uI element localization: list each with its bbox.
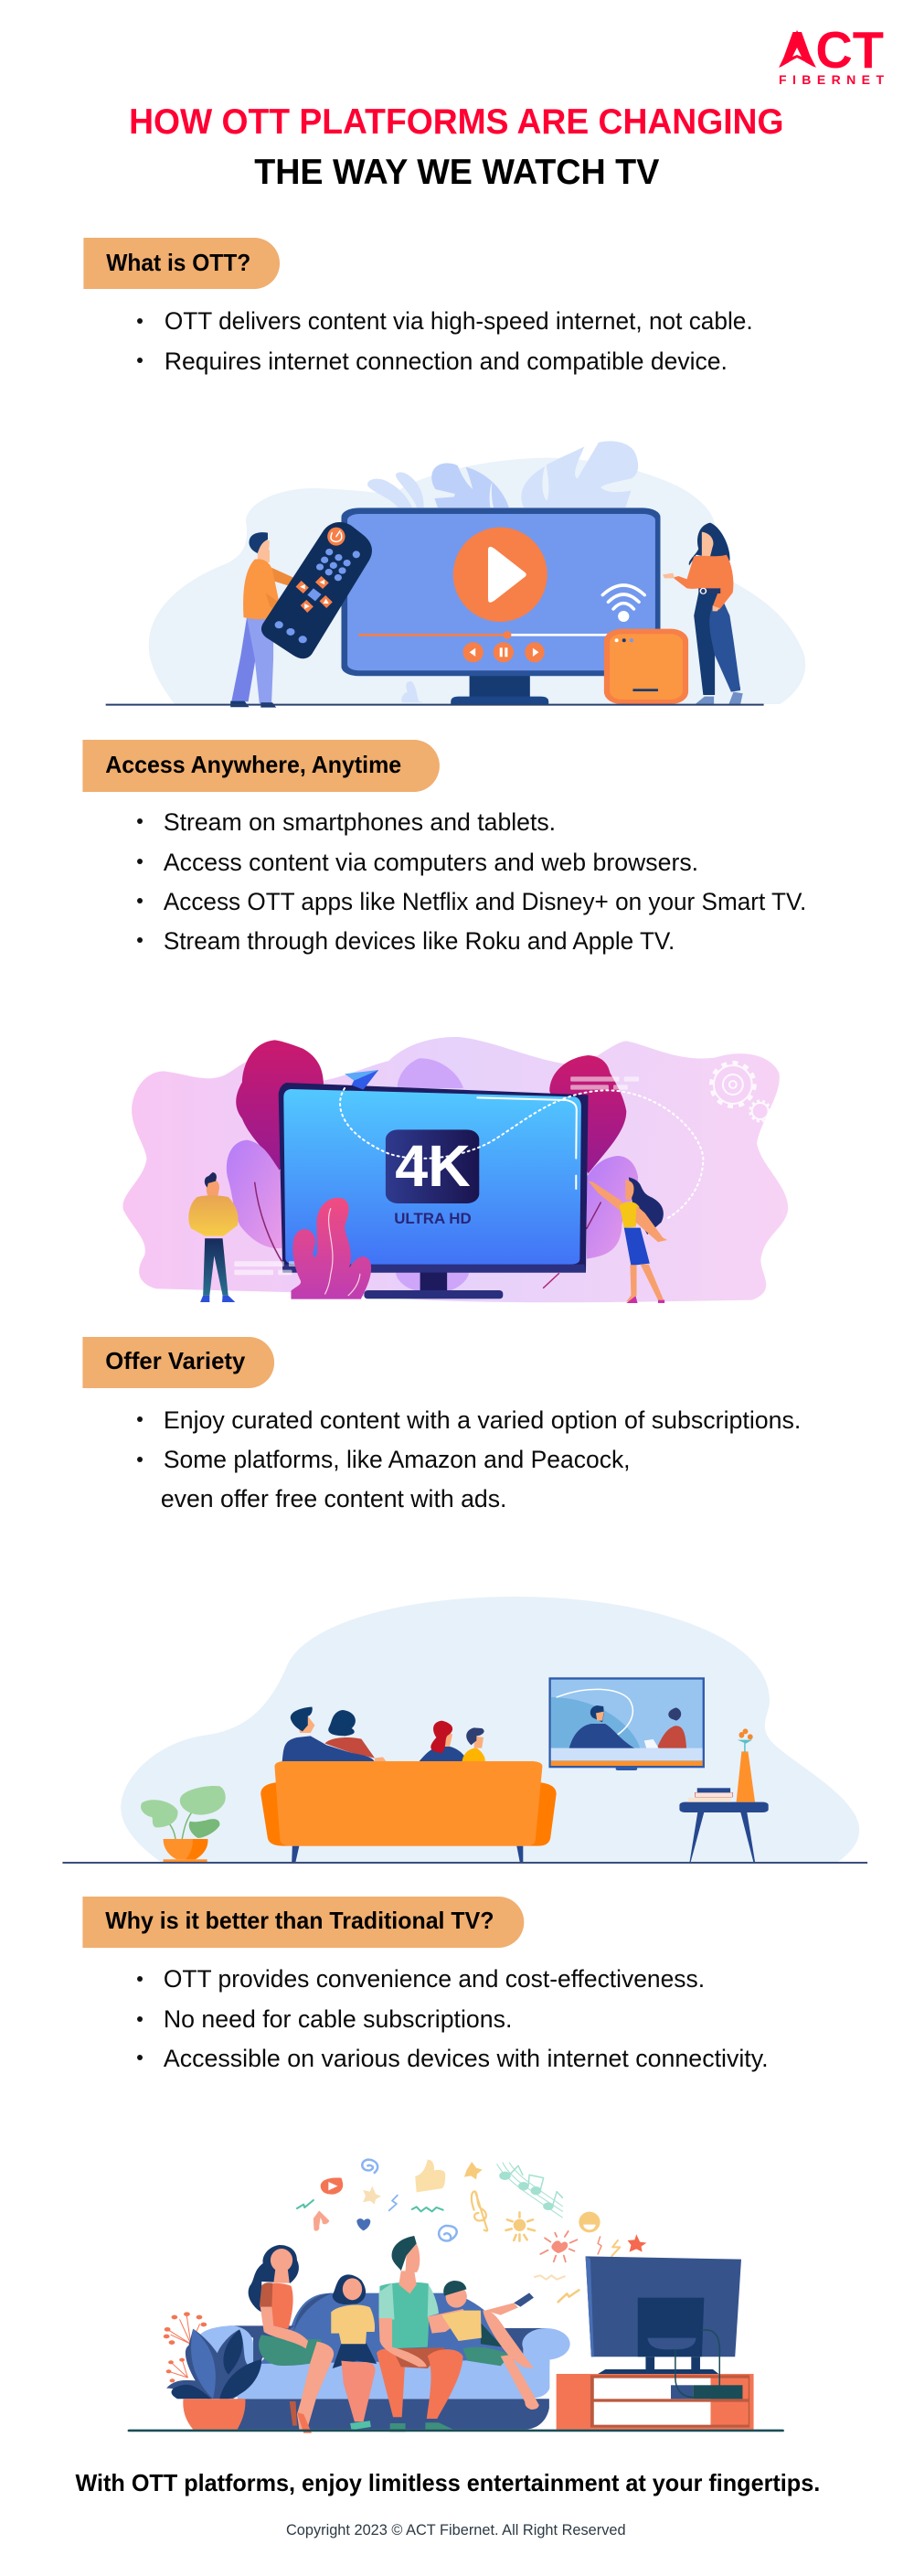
heading: Why is it better than Traditional TV? — [82, 1897, 524, 1948]
boy with remote — [441, 2281, 539, 2410]
title: THE WAY WE WATCH TV — [254, 153, 659, 192]
title — [129, 102, 783, 192]
wall TV — [548, 1677, 705, 1770]
TV — [341, 508, 661, 705]
text: ULTRA HD: ULTRA HD — [394, 1210, 472, 1227]
girl — [331, 2274, 377, 2430]
floor line — [62, 1862, 867, 1864]
background blob — [122, 1037, 788, 1302]
text block: what is OTT bullets: OTT delivers content via high-speed internet, not cable. — [165, 307, 753, 335]
side table with vase and books — [679, 1728, 769, 1862]
heading: What is OTT?: What is OTT? — [106, 251, 250, 276]
sofa — [260, 1761, 557, 1863]
family heads — [282, 1707, 485, 1762]
leaves — [367, 441, 638, 702]
woman — [249, 2245, 334, 2433]
logo: ACT Fibernet: FIBERNET — [779, 72, 884, 87]
text block: access bullets: Stream on smartphones and tablets. — [164, 808, 556, 836]
text block: access bullets: Stream through devices like Roku and Apple TV. — [164, 927, 675, 955]
potted plant — [141, 1786, 226, 1862]
text block: what is OTT bullets — [137, 307, 753, 375]
sofa — [197, 2293, 570, 2430]
man — [188, 1172, 239, 1302]
background blob — [149, 458, 805, 704]
icon: gears — [711, 1063, 771, 1121]
heading: What is OTT? — [83, 238, 280, 289]
heading: Why is it better than Traditional TV?: Why is it better than Traditional TV? — [105, 1908, 494, 1934]
text block: why better bullets: No need for cable subscriptions. — [164, 2005, 512, 2033]
plant — [164, 2312, 261, 2430]
text block: why better bullets — [137, 1965, 769, 2072]
heading: Access Anywhere, Anytime — [82, 740, 440, 792]
TV — [279, 1083, 589, 1299]
closing statement: With OTT platforms, enjoy limitless entertainment at your fingertips. — [75, 2471, 820, 2496]
text block: offer variety bullets — [137, 1406, 801, 1512]
copyright: Copyright 2023 © ACT Fibernet. All Right Reserved — [286, 2522, 626, 2539]
title: HOW OTT PLATFORMS ARE CHANGING — [129, 102, 783, 142]
text: 4K: 4K — [395, 1133, 471, 1199]
text block: access bullets: Access OTT apps like Netflix and Disney+ on your Smart TV. — [164, 888, 806, 915]
TV back — [586, 2256, 741, 2398]
TV cabinet — [557, 2374, 754, 2430]
woman — [589, 1177, 667, 1303]
heading: Access Anywhere, Anytime: Access Anywhere, Anytime — [105, 753, 401, 778]
floating icons — [297, 2160, 646, 2302]
wifi icon — [602, 585, 644, 622]
floor line — [106, 704, 764, 706]
illustration: family watching TV with floating icons — [128, 2160, 784, 2433]
illustration: people with remote and TV — [106, 441, 805, 708]
man — [377, 2236, 467, 2432]
background blob — [121, 1597, 859, 1862]
set top box — [604, 629, 688, 704]
text block: offer variety bullets: Some platforms, like Amazon and Peacock, — [164, 1446, 631, 1473]
plant — [291, 1198, 371, 1299]
text block: access bullets: Access content via computers and web browsers. — [164, 849, 698, 876]
4K badge — [386, 1129, 479, 1203]
text block: offer variety bullets: Enjoy curated content with a varied option of subscriptions. — [164, 1406, 801, 1434]
leaves behind TV — [227, 1040, 638, 1291]
man — [230, 532, 307, 708]
illustration: 4K ultra HD TV — [122, 1037, 788, 1303]
dotted line — [340, 1088, 703, 1219]
illustration: family on orange sofa — [62, 1597, 867, 1864]
heading: Offer Variety — [82, 1337, 274, 1388]
floor line — [128, 2430, 784, 2432]
text block: what is OTT bullets: Requires internet connection and compatible device. — [165, 347, 728, 375]
heading: Offer Variety: Offer Variety — [105, 1349, 245, 1374]
paper plane — [345, 1070, 378, 1090]
woman — [663, 523, 743, 704]
remote control — [261, 522, 372, 658]
text block: offer variety bullets: even offer free content with ads. — [161, 1485, 506, 1512]
text block: access bullets — [137, 808, 806, 955]
logo: ACT Fibernet: ACT — [779, 21, 884, 80]
info bars — [234, 1076, 639, 1275]
text block: why better bullets: OTT provides convenience and cost-effectiveness. — [164, 1965, 705, 1993]
text block: why better bullets: Accessible on various devices with internet connectivity. — [164, 2045, 769, 2072]
